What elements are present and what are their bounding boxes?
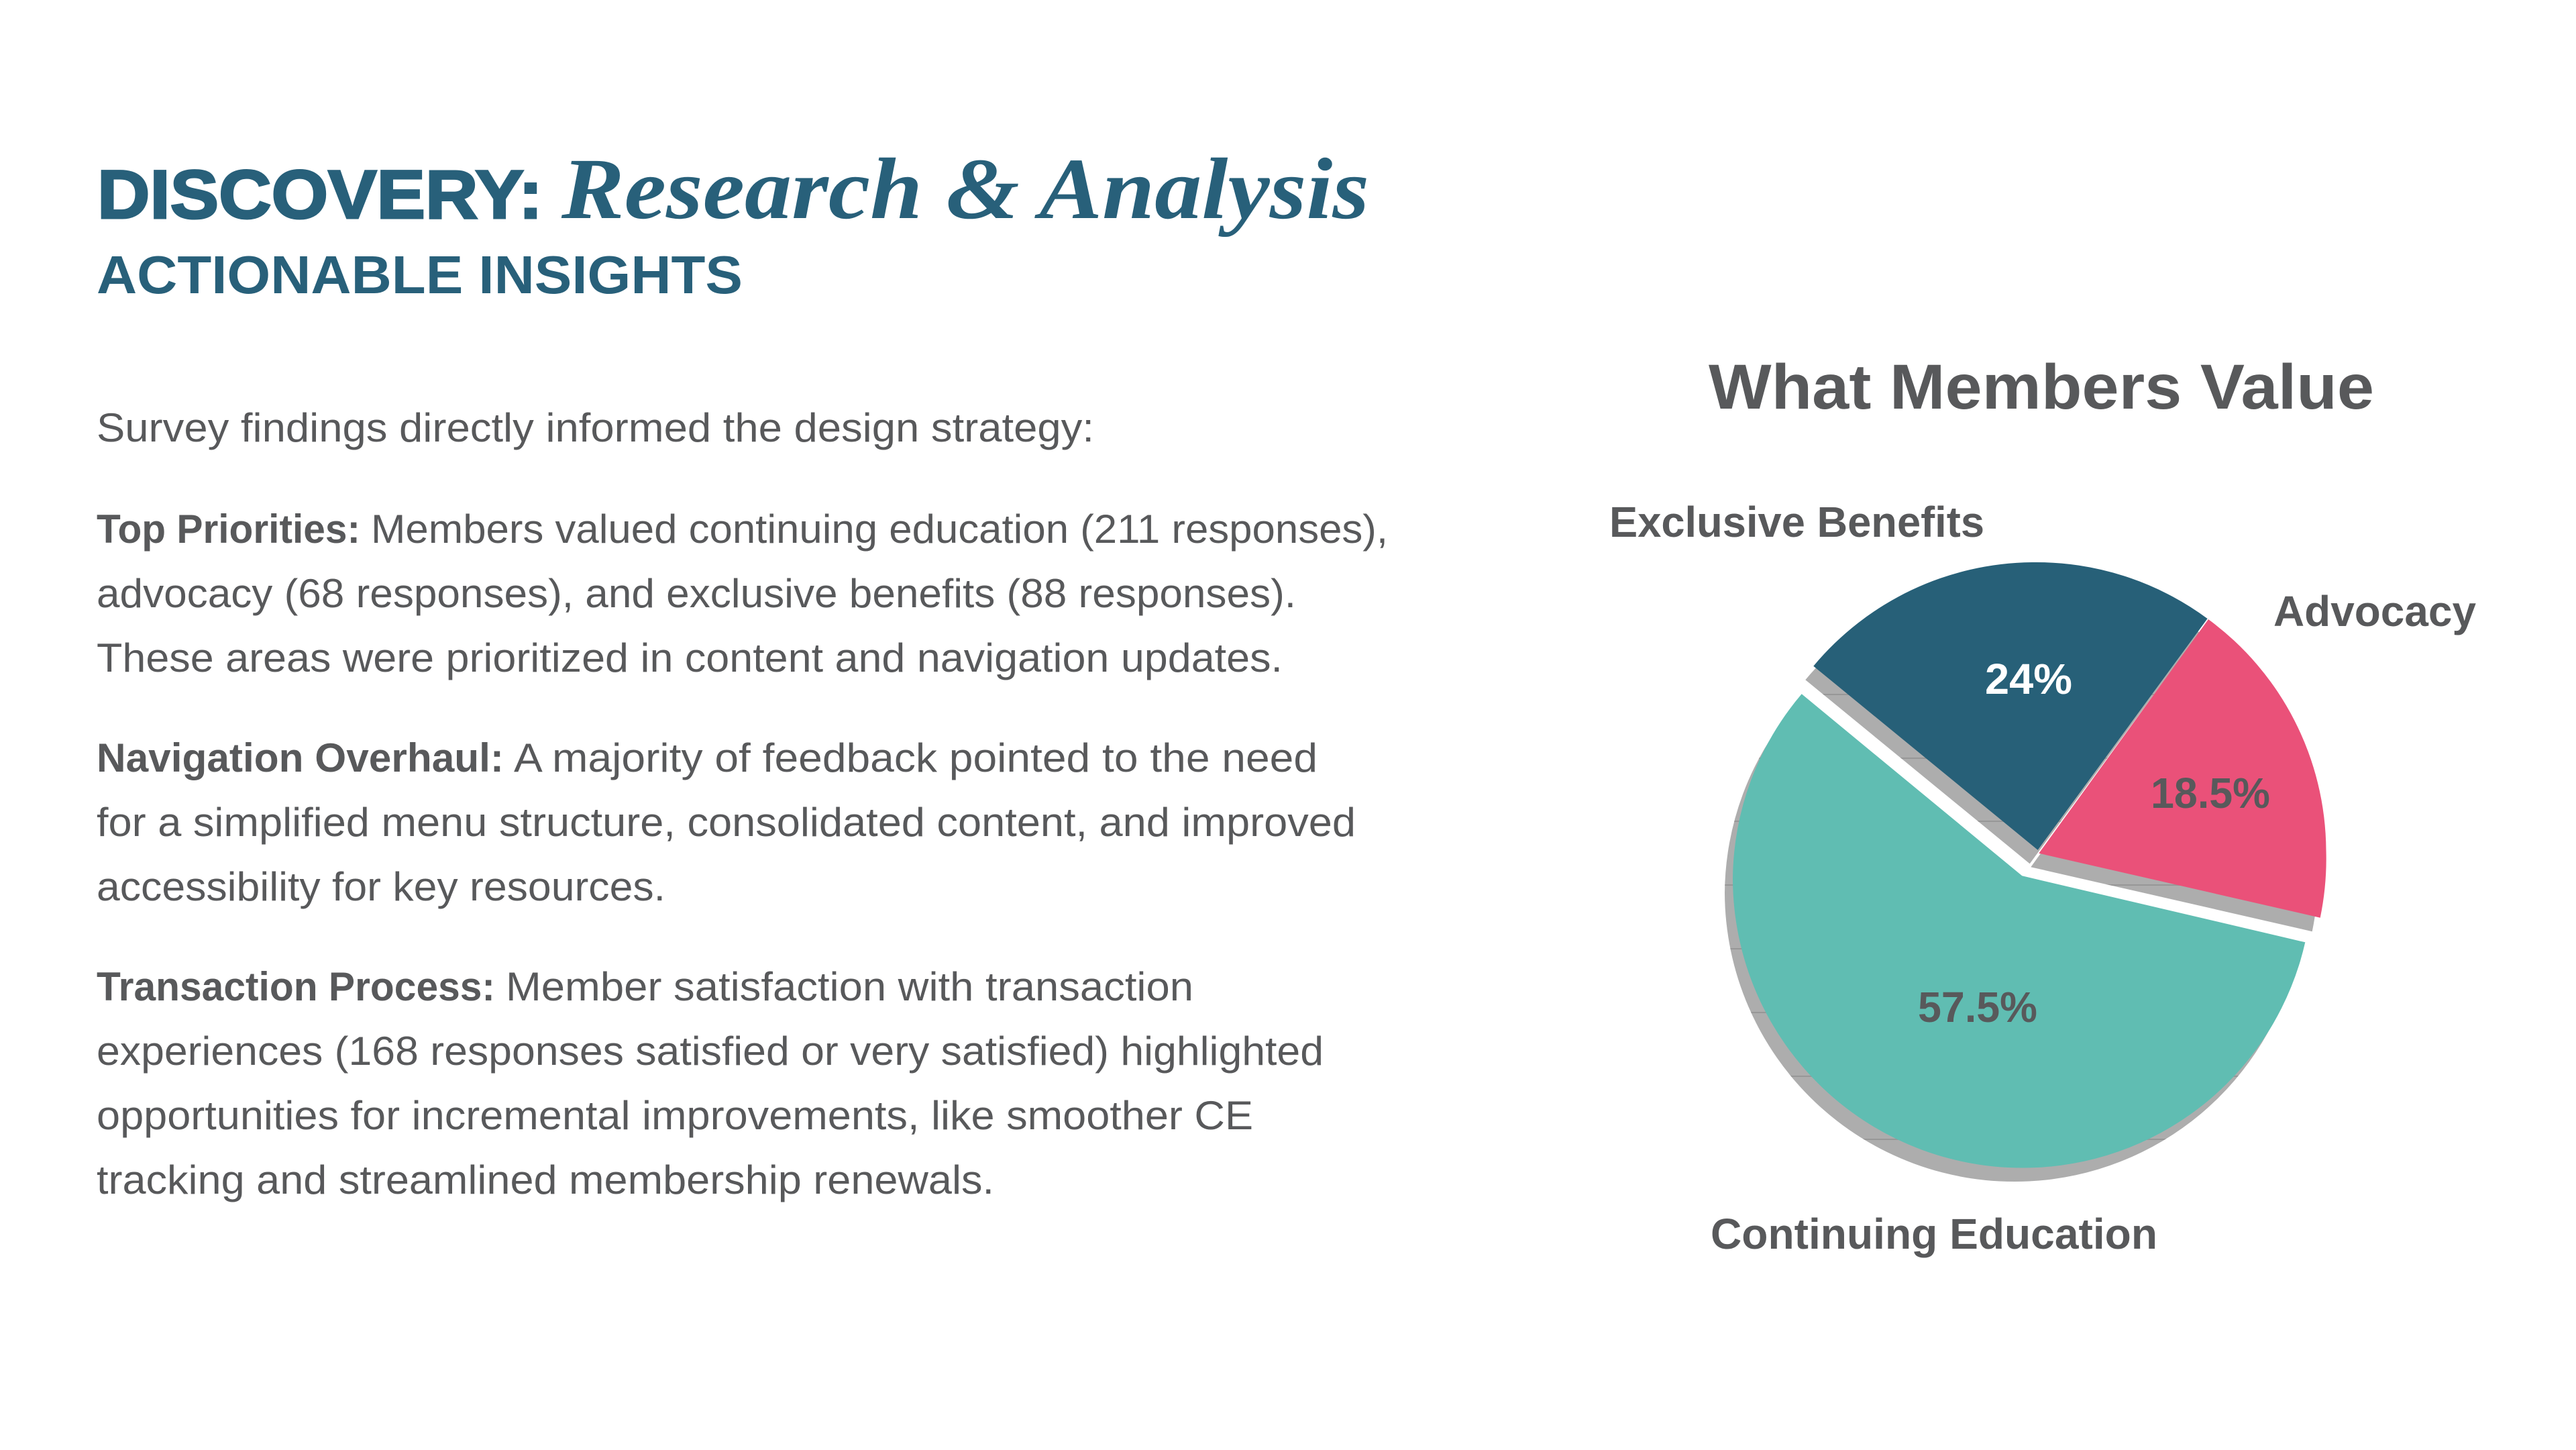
text block: transaction process: [97, 964, 1324, 1202]
label: exclusive benefits: Exclusive Benefits: [1609, 498, 1984, 546]
value: 57.5%: 57.5%: [1918, 983, 2037, 1031]
label: top priorities: Top Priorities:: [97, 507, 360, 552]
line: opportunities: opportunities for incremental improvements, like smoother CE: [97, 1093, 1253, 1138]
value: 24%: 24%: [1985, 655, 2072, 703]
line: a majority: A majority of feedback pointed to the need: [514, 735, 1318, 780]
line: accessibility: accessibility for key resources.: [97, 864, 665, 909]
line: tracking: tracking and streamlined membership renewals.: [97, 1157, 994, 1202]
text block: navigation overhaul: [97, 735, 1356, 909]
line: simplified menu: for a simplified menu structure, consolidated content, and improved: [97, 800, 1356, 845]
chart title: What Members Value: [1709, 352, 2374, 423]
line: advocacy: advocacy (68 responses), and exclusive benefits (88 responses).: [97, 571, 1296, 616]
line: these areas: These areas were prioritized in content and navigation updates.: [97, 635, 1283, 680]
text block: survey intro: Survey findings directly informed the design strategy:: [97, 405, 1094, 450]
slice: continuing education: [1733, 694, 2305, 1168]
heading: Research and Analysis: Research & Analysis: [561, 141, 1369, 238]
label: transaction process: Transaction Process:: [97, 964, 495, 1009]
label: advocacy: Advocacy: [2273, 587, 2476, 635]
line: experiences: experiences (168 responses satisfied or very satisfied) highlighted: [97, 1029, 1324, 1074]
subtitle: ACTIONABLE INSIGHTS: [97, 245, 743, 305]
slice: advocacy: [2039, 619, 2326, 918]
line: member satisfaction: Member satisfaction with transaction: [506, 964, 1193, 1009]
title: [97, 141, 1369, 238]
label: navigation overhaul: Navigation Overhaul:: [97, 735, 504, 780]
line: members valued: Members valued continuing education (211 responses),: [371, 507, 1388, 552]
slice: exclusive benefits: [1813, 562, 2208, 850]
label: continuing education: Continuing Education: [1711, 1210, 2157, 1258]
pie chart: [1725, 562, 2326, 1182]
text block: top priorities: [97, 507, 1388, 680]
heading: Discovery: DISCOVERY:: [97, 156, 543, 233]
value: 18.5%: 18.5%: [2151, 769, 2270, 817]
pie shadow: [1725, 631, 2315, 1182]
